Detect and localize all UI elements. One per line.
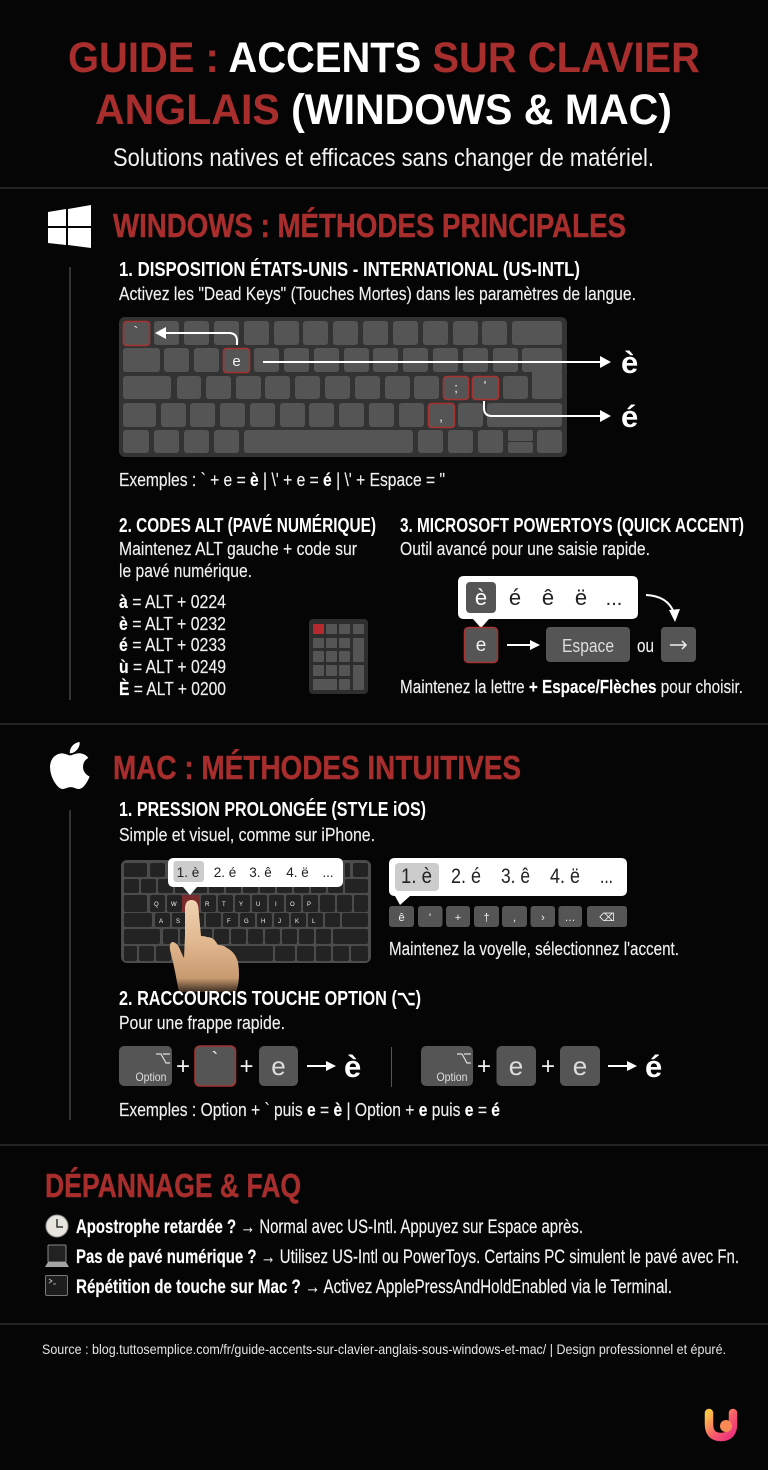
popup: numbered accents: 2. é: [214, 865, 236, 880]
illustration: mac keyboard with hand: T: [222, 902, 226, 908]
popup: numbered accents: ...: [322, 865, 334, 880]
key row: accents: ': [429, 912, 431, 924]
key: semicolon: [444, 376, 468, 400]
shortcut: é: [421, 1046, 662, 1086]
shortcut: è: +: [176, 1053, 190, 1080]
text: FAQ row 1: Apostrophe retardée ? → Normal avec US-Intl. Appuyez sur Espace après.: [76, 1217, 583, 1238]
panel: FAQ: [45, 1167, 739, 1298]
list: Alt codes: é = ALT + 0233: [119, 635, 226, 655]
key row: accents: †: [483, 912, 490, 924]
popup: accents: é: [509, 585, 521, 610]
icon: logo: [709, 1413, 733, 1437]
key: e: [464, 628, 498, 662]
illustration: mac keyboard with hand: U: [256, 902, 260, 908]
popup: accent selector: 1. è: [401, 865, 432, 888]
popup: numbered accents: 3. ê: [249, 865, 272, 880]
popup: accents: ê: [542, 585, 554, 610]
list: Alt codes: à = ALT + 0224: [119, 592, 226, 612]
illustration: mac keyboard with hand: F: [227, 919, 231, 925]
panel: windows: [48, 205, 744, 700]
key: backtick: `: [134, 323, 138, 339]
illustration: mac keyboard with hand: I: [275, 902, 277, 908]
shortcut: é: é: [645, 1049, 662, 1084]
icon: clock: [46, 1215, 68, 1237]
heading: windows: WINDOWS : MÉTHODES PRINCIPALES: [113, 207, 626, 244]
illustration: mac keyboard with hand: Q: [154, 902, 159, 908]
key: e: e: [232, 353, 241, 370]
arrow: curved: [646, 595, 680, 622]
key row: accents: [389, 906, 627, 927]
illustration: mac keyboard with hand: S: [176, 919, 180, 925]
illustration: mac keyboard with hand: L: [312, 919, 316, 925]
shortcut: é: +: [541, 1053, 555, 1080]
icon: hand: [170, 900, 239, 992]
icon: apple logo: [50, 742, 90, 789]
text: press and hold caption: Maintenez la voyelle, sélectionnez l'accent.: [389, 939, 679, 959]
key: comma: [428, 404, 454, 428]
text: press and hold description: Simple et visuel, comme sur iPhone.: [119, 825, 375, 845]
text: option description: Pour une frappe rapide.: [119, 1013, 285, 1033]
shortcut: è: e: [271, 1051, 286, 1081]
heading: Alt codes: 2. CODES ALT (PAVÉ NUMÉRIQUE): [119, 514, 376, 537]
popup: accent selector: [389, 858, 627, 905]
result: é: é: [621, 399, 638, 434]
text: US-Intl examples: Exemples : ` + e = è | \' + e = é | \' + Espace = ": [119, 470, 445, 490]
popup: accents: è: [475, 585, 487, 610]
title: [68, 34, 700, 134]
shortcut: è: è: [344, 1049, 361, 1084]
arrow: e to è: [263, 356, 611, 368]
key: apostrophe: ': [484, 378, 486, 393]
list: Alt codes: È = ALT + 0200: [119, 678, 226, 699]
heading: mac: MAC : MÉTHODES INTUITIVES: [113, 749, 521, 786]
text: ou: ou: [637, 636, 654, 656]
icon: laptop: [45, 1245, 69, 1267]
shortcut: é: e: [573, 1051, 587, 1081]
popup: accent selector: ...: [600, 865, 613, 888]
illustration: mac keyboard with hand: A: [159, 919, 163, 925]
keyboard diagram: [119, 317, 611, 457]
key: arrow: [661, 627, 696, 662]
key row: accents: ,: [513, 912, 516, 924]
key: e: [224, 348, 250, 372]
shortcut: é: e: [509, 1051, 523, 1081]
illustration: mac keyboard with hand: R: [205, 902, 210, 908]
popup: accent selector: 4. ë: [550, 865, 580, 888]
popup: accents: ë: [575, 585, 587, 610]
popup: numbered accents: [168, 858, 343, 895]
key: Espace: Espace: [562, 636, 614, 656]
arrow: e to backtick: [155, 327, 237, 345]
illustration: mac keyboard with hand: [121, 858, 371, 992]
shortcut: è: [119, 1046, 361, 1086]
text: Alt codes description: Maintenez ALT gauche + code sur: [119, 539, 357, 559]
text: Alt codes description: [119, 539, 357, 581]
shortcut: é: Option: [436, 1070, 468, 1084]
key row: accents: ›: [541, 912, 545, 924]
popup: numbered accents: 1. è: [177, 865, 199, 880]
shortcut: é: +: [477, 1053, 491, 1080]
illustration: mac keyboard with hand: G: [244, 919, 249, 925]
shortcut: è: +: [239, 1053, 254, 1080]
key row: accents: …: [564, 912, 576, 924]
illustration: mac keyboard with hand: H: [261, 919, 265, 925]
key row: accents: ⌫: [599, 912, 615, 924]
icon: numeric keypad: [309, 619, 368, 694]
illustration: mac keyboard with hand: Y: [239, 902, 243, 908]
text: Alt codes description: le pavé numérique.: [119, 561, 252, 581]
heading: FAQ: DÉPANNAGE & FAQ: [45, 1167, 301, 1204]
key row: accents: +: [455, 912, 461, 924]
text: PowerToys description: Outil avancé pour une saisie rapide.: [400, 539, 650, 559]
text: PowerToys caption: Maintenez la lettre + Espace/Flèches pour choisir.: [400, 677, 743, 697]
heading: option shortcuts: 2. RACCOURCIS TOUCHE OPTION (⌥): [119, 987, 421, 1010]
key: backtick: [124, 322, 150, 346]
popup: numbered accents: 4. ë: [286, 865, 309, 880]
icon: windows logo: [48, 205, 91, 248]
title: ANGLAIS (WINDOWS & MAC): [95, 86, 672, 134]
key: e: e: [476, 635, 486, 656]
text: option examples: Exemples : Option + ` puis e = è | Option + e puis e = é: [119, 1100, 500, 1120]
list: Alt codes: è = ALT + 0232: [119, 614, 226, 634]
shortcut: è: `: [212, 1049, 218, 1071]
text: FAQ row 3: Répétition de touche sur Mac ? → Activez ApplePressAndHoldEnabled via le Terminal.: [76, 1277, 672, 1298]
key: semicolon: ;: [454, 380, 458, 395]
illustration: mac keyboard with hand: W: [171, 902, 177, 908]
illustration: mac keyboard with hand: J: [278, 919, 281, 925]
key row: accents: ê: [398, 912, 405, 924]
arrow: apostrophe to é: [484, 401, 611, 422]
shortcut: è: Option: [136, 1070, 166, 1084]
subtitle: Solutions natives et efficaces sans changer de matériel.: [113, 144, 654, 172]
text: US-Intl description: Activez les "Dead Keys" (Touches Mortes) dans les paramètres de langue.: [119, 284, 636, 304]
list: Alt codes: [119, 592, 226, 699]
key: Espace: [546, 627, 630, 662]
diagram: quick accent: [458, 576, 696, 662]
popup: accents: ...: [606, 588, 622, 610]
popup: accent selector: 3. ê: [501, 865, 530, 888]
icon: terminal: [46, 1276, 68, 1296]
result: è: è: [621, 345, 638, 380]
illustration: mac keyboard with hand: P: [307, 902, 311, 908]
heading: press and hold: 1. PRESSION PROLONGÉE (STYLE iOS): [119, 798, 426, 821]
illustration: mac keyboard with hand: K: [295, 919, 299, 925]
illustration: mac keyboard with hand: O: [290, 902, 295, 908]
key: comma: ,: [439, 409, 443, 424]
panel: mac: [50, 742, 679, 1120]
popup: accent selector: 2. é: [451, 865, 481, 888]
arrow: [507, 640, 540, 650]
title: GUIDE : ACCENTS SUR CLAVIER: [68, 34, 700, 82]
popup: accents: [458, 576, 638, 628]
key: apostrophe: [472, 376, 498, 400]
list: Alt codes: ù = ALT + 0249: [119, 657, 226, 677]
heading: US-Intl: 1. DISPOSITION ÉTATS-UNIS - INTERNATIONAL (US-INTL): [119, 258, 580, 281]
